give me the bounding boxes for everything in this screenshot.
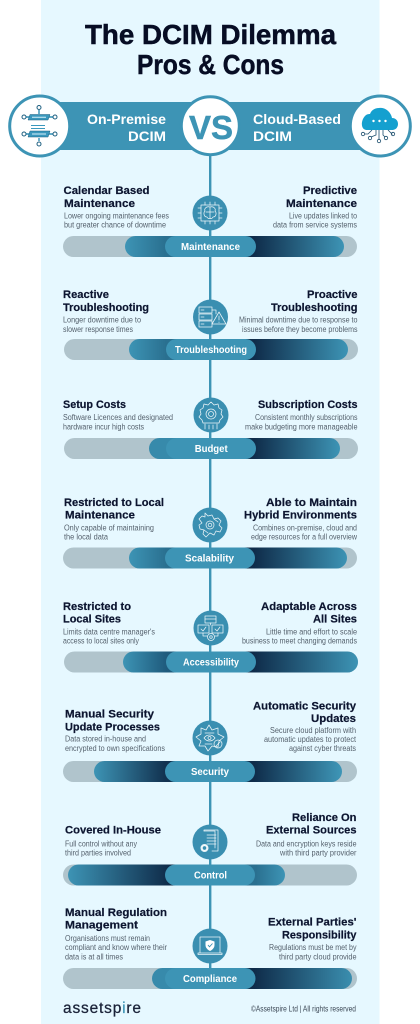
row: accessibility	[63, 601, 358, 672]
cloud accessibility text: Adaptable Across	[261, 601, 357, 613]
on-premise security text: Data stored in-house and	[65, 735, 146, 744]
on-premise scalability text: Maintenance	[65, 510, 135, 522]
row: security	[63, 700, 357, 782]
on-premise security text: Update Processes	[65, 721, 160, 733]
score bar: compliance	[63, 968, 357, 989]
cloud troubleshooting text: Proactive	[307, 289, 358, 301]
icon: servers and warning	[193, 300, 228, 334]
cloud security text: Secure cloud platform with	[270, 726, 356, 735]
icon: gear with coin and hands	[194, 398, 228, 432]
on-premise maintenance text: Calendar Based	[64, 185, 150, 197]
cloud troubleshooting text: Minimal downtime due to response to	[239, 316, 358, 324]
on-premise scalability text: the local data	[64, 533, 109, 542]
cloud accessibility text	[242, 601, 358, 646]
score bar: budget: Budget	[195, 444, 228, 455]
cloud compliance text	[268, 917, 357, 962]
row: control	[63, 812, 357, 886]
cloud scalability text	[244, 497, 357, 542]
score bar: accessibility	[64, 652, 358, 672]
on-premise security text: encrypted to own specifications	[65, 744, 165, 753]
central timeline line	[209, 155, 211, 970]
icon: brain chip	[192, 196, 228, 230]
cloud security text: Automatic Security	[253, 700, 357, 712]
comparison header banner: DCIM	[253, 128, 292, 144]
cloud compliance text: Responsibility	[282, 929, 357, 941]
cloud scalability text: Able to Maintain	[266, 497, 357, 509]
cloud scalability text: Combines on-premise, cloud and	[253, 524, 357, 533]
cloud control text: Reliance On	[292, 812, 357, 824]
on-premise scalability text	[64, 497, 164, 542]
icon: documents and gear	[192, 824, 228, 860]
score bar: security	[63, 761, 357, 782]
cloud maintenance text	[273, 185, 357, 230]
comparison header banner: VS	[189, 109, 233, 146]
cloud budget text	[245, 399, 358, 432]
cloud maintenance text: Live updates linked to	[289, 212, 357, 220]
row: compliance	[63, 907, 357, 989]
on-premise control text	[65, 825, 161, 857]
cloud compliance text: Regulations must be met by	[269, 943, 356, 952]
score bar: maintenance	[63, 236, 357, 257]
cloud budget text: Subscription Costs	[258, 399, 358, 411]
row: troubleshooting	[63, 289, 358, 360]
on-premise accessibility text: Local Sites	[63, 614, 121, 626]
cloud accessibility text: Little time and effort to scale	[266, 628, 358, 637]
on-premise accessibility text	[63, 601, 155, 646]
cloud budget text: Consistent monthly subscriptions	[255, 413, 358, 422]
on-premise scalability text: Only capable of maintaining	[64, 524, 154, 533]
cloud scalability text: Hybrid Environments	[244, 510, 357, 522]
comparison header banner	[40, 97, 380, 155]
on-premise compliance text: data is at all times	[65, 952, 123, 962]
icon: virus with eye and shield	[192, 720, 228, 756]
cloud maintenance text: Predictive	[303, 185, 357, 197]
on-premise maintenance text	[64, 185, 169, 230]
cloud security text: against cyber threats	[289, 744, 356, 753]
row: scalability	[63, 497, 357, 568]
icon: connected monitors and gear	[194, 610, 228, 646]
cloud control text: External Sources	[266, 825, 356, 837]
cloud compliance text: third party cloud provide	[279, 952, 357, 962]
score bar: maintenance: Maintenance	[181, 242, 240, 253]
score bar: troubleshooting: Troubleshooting	[175, 345, 247, 356]
row: budget	[63, 398, 358, 459]
cloud scalability text: edge resources for a full overview	[251, 533, 357, 542]
on-premise troubleshooting text: Longer downtime due to	[63, 316, 141, 324]
on-premise maintenance text: Lower ongoing maintenance fees	[64, 212, 169, 220]
cloud security text	[253, 700, 357, 753]
cloud maintenance text: data from service systems	[273, 220, 357, 230]
cloud accessibility text: business to meet changing demands	[242, 637, 357, 646]
icon: interlocking gears	[192, 508, 228, 542]
comparison header banner: DCIM	[128, 128, 166, 144]
score bar: control: Control	[194, 870, 227, 882]
on-premise accessibility text: Limits data centre manager's	[63, 628, 155, 637]
cloud control text	[256, 812, 357, 857]
cloud troubleshooting text: issues before they become problems	[242, 325, 358, 334]
cloud troubleshooting text	[239, 289, 358, 334]
on-premise maintenance text: but greater chance of downtime	[64, 220, 166, 230]
title: Pros & Cons	[137, 49, 284, 80]
on-premise maintenance text: Maintenance	[64, 198, 135, 210]
on-premise troubleshooting text: Reactive	[63, 289, 109, 301]
icon: laptop with shield	[192, 928, 228, 964]
score bar: scalability	[63, 548, 357, 568]
logo: assetspire: assetspire	[63, 1000, 141, 1017]
icon: cloud network	[350, 96, 410, 156]
on-premise accessibility text: Restricted to	[63, 601, 131, 613]
score bar: accessibility: Accessibility	[183, 658, 239, 668]
on-premise control text: Covered In-House	[65, 825, 161, 837]
on-premise troubleshooting text	[63, 289, 149, 334]
on-premise compliance text	[65, 907, 167, 962]
score bar: compliance: Compliance	[183, 974, 237, 985]
on-premise troubleshooting text: slower response times	[63, 325, 133, 334]
title: The DCIM Dilemma	[85, 19, 337, 50]
cloud troubleshooting text: Troubleshooting	[271, 302, 358, 314]
cloud compliance text: External Parties'	[268, 917, 357, 929]
score bar: budget	[64, 438, 358, 459]
on-premise scalability text: Restricted to Local	[64, 497, 164, 509]
comparison header banner: On-Premise	[87, 111, 166, 127]
on-premise budget text: hardware incur high costs	[63, 422, 144, 432]
on-premise compliance text: compliant and know where their	[65, 943, 167, 952]
on-premise accessibility text: access to local sites only	[63, 637, 139, 646]
on-premise security text: Manual Security	[65, 709, 155, 721]
on-premise troubleshooting text: Troubleshooting	[63, 302, 149, 314]
title	[85, 19, 337, 80]
score bar: scalability: Scalability	[185, 554, 234, 564]
on-premise control text: Full control without any	[65, 839, 137, 848]
on-premise security text	[65, 709, 165, 753]
icon: on-premise network hardware	[10, 96, 70, 156]
row: maintenance	[63, 185, 357, 257]
on-premise compliance text: Organisations must remain	[65, 934, 150, 943]
cloud security text: Updates	[311, 713, 356, 725]
on-premise budget text: Setup Costs	[63, 399, 126, 411]
cloud maintenance text: Maintenance	[286, 198, 357, 210]
cloud budget text: make budgeting more manageable	[245, 422, 358, 432]
cloud control text: Data and encryption keys reside	[256, 839, 357, 848]
cloud control text: with third party provider	[279, 848, 357, 857]
on-premise budget text	[63, 399, 173, 432]
copyright notice: ©Assetspire Ltd | All rights reserved	[251, 1005, 356, 1014]
on-premise compliance text: Management	[65, 920, 138, 932]
on-premise control text: third parties involved	[65, 848, 131, 857]
cloud accessibility text: All Sites	[313, 614, 357, 626]
on-premise compliance text: Manual Regulation	[65, 907, 167, 919]
on-premise budget text: Software Licences and designated	[63, 413, 173, 422]
score bar: control	[63, 864, 357, 886]
cloud security text: automatic updates to protect	[264, 735, 357, 744]
score bar: troubleshooting	[64, 339, 358, 360]
score bar: security: Security	[191, 767, 229, 778]
comparison header banner: Cloud-Based	[253, 111, 341, 127]
